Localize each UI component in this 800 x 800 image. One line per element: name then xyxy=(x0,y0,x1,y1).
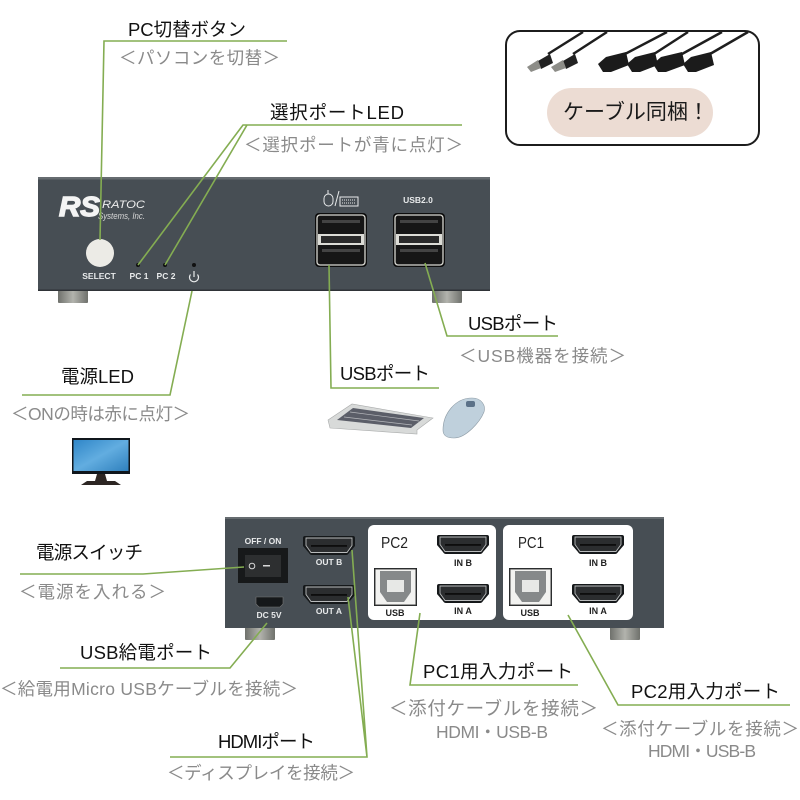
label: PC1 input port: ＜添付ケーブルを接続＞ xyxy=(389,698,598,719)
label: selected port LED: 選択ポートLED xyxy=(270,102,404,123)
label: PC1 input port: PC1用入力ポート xyxy=(423,661,573,682)
icon: mouse xyxy=(443,398,484,438)
label: power LED: ＜ONの時は赤に点灯＞ xyxy=(11,404,190,424)
label: USB power port: USB給電ポート xyxy=(80,642,212,663)
HDMI OUT B xyxy=(303,536,355,567)
icon: mouse and keyboard xyxy=(324,190,358,206)
logo: Systems, Inc. xyxy=(98,211,145,222)
label: PC2 input port: PC2用入力ポート xyxy=(631,681,780,702)
label: PC switch button: ＜パソコンを切替＞ xyxy=(119,48,280,68)
LED indicators xyxy=(130,263,199,282)
USB2.0 label: USB2.0 xyxy=(403,195,433,205)
panel: front of device xyxy=(38,177,490,303)
PC1 input block: PC1 xyxy=(518,535,544,552)
micro USB port: DC 5V xyxy=(256,610,282,620)
PC1 input block: IN B xyxy=(589,558,608,568)
PC1 input block: IN A xyxy=(589,606,607,616)
icon: keyboard xyxy=(328,404,433,434)
HDMI OUT A xyxy=(303,585,355,616)
label: PC switch button xyxy=(100,19,287,240)
label: USB port right xyxy=(425,263,626,366)
LED indicators: PC 1 xyxy=(130,271,149,281)
PC2 input block xyxy=(368,525,496,620)
panel: included cables xyxy=(506,31,759,145)
label: power LED xyxy=(11,291,192,424)
label: PC2 input port xyxy=(568,615,799,761)
icon: cables xyxy=(527,32,748,72)
label: HDMI port: HDMIポート xyxy=(218,731,315,752)
label: USB power port: ＜給電用Micro USBケーブルを接続＞ xyxy=(0,679,298,699)
label: power LED: 電源LED xyxy=(61,366,134,387)
micro USB port xyxy=(256,597,283,620)
label: power switch: 電源スイッチ xyxy=(36,542,143,563)
label: HDMI port: ＜ディスプレイを接続＞ xyxy=(167,763,355,783)
power switch: OFF / ON xyxy=(245,536,281,546)
logo: RS xyxy=(59,191,100,222)
PC1 input block xyxy=(503,525,633,620)
label: USB port left xyxy=(329,265,439,388)
USB ports right xyxy=(393,213,445,267)
PC1 input block: USB xyxy=(520,608,540,618)
badge: cables included: ケーブル同梱！ xyxy=(563,101,709,124)
HDMI OUT A: OUT A xyxy=(316,606,342,616)
label: selected port LED xyxy=(138,102,463,265)
HDMI OUT B: OUT B xyxy=(316,557,342,567)
panel: rear of device xyxy=(225,517,664,640)
select button: SELECT xyxy=(82,271,117,281)
label: selected port LED: ＜選択ポートが青に点灯＞ xyxy=(244,135,463,155)
label: PC2 input port: HDMI・USB-B xyxy=(648,741,756,761)
icon: monitor xyxy=(72,438,130,485)
power switch xyxy=(238,536,288,583)
PC2 input block: PC2 xyxy=(381,535,408,552)
badge: cables included xyxy=(547,88,713,137)
label: USB power port xyxy=(0,623,298,699)
label: PC1 input port: HDMI・USB-B xyxy=(436,722,548,742)
label: power switch: ＜電源を入れる＞ xyxy=(19,582,166,602)
PC2 input block: USB xyxy=(385,608,405,618)
USB ports left xyxy=(315,213,367,267)
LED indicators: PC 2 xyxy=(157,271,176,281)
PC2 input block: IN A xyxy=(454,606,472,616)
label: PC2 input port: ＜添付ケーブルを接続＞ xyxy=(601,719,799,739)
PC2 input block: IN B xyxy=(454,558,473,568)
select button xyxy=(82,239,117,281)
label: power switch xyxy=(19,542,244,602)
label: PC1 input port xyxy=(389,613,598,742)
label: USB port right: USBポート xyxy=(468,313,558,334)
label: PC switch button: PC切替ボタン xyxy=(128,19,246,40)
logo xyxy=(59,191,145,222)
label: USB port right: ＜USB機器を接続＞ xyxy=(459,346,626,366)
logo: RATOC xyxy=(102,199,145,211)
label: USB port left: USBポート xyxy=(340,363,430,384)
label: HDMI port xyxy=(167,550,367,783)
